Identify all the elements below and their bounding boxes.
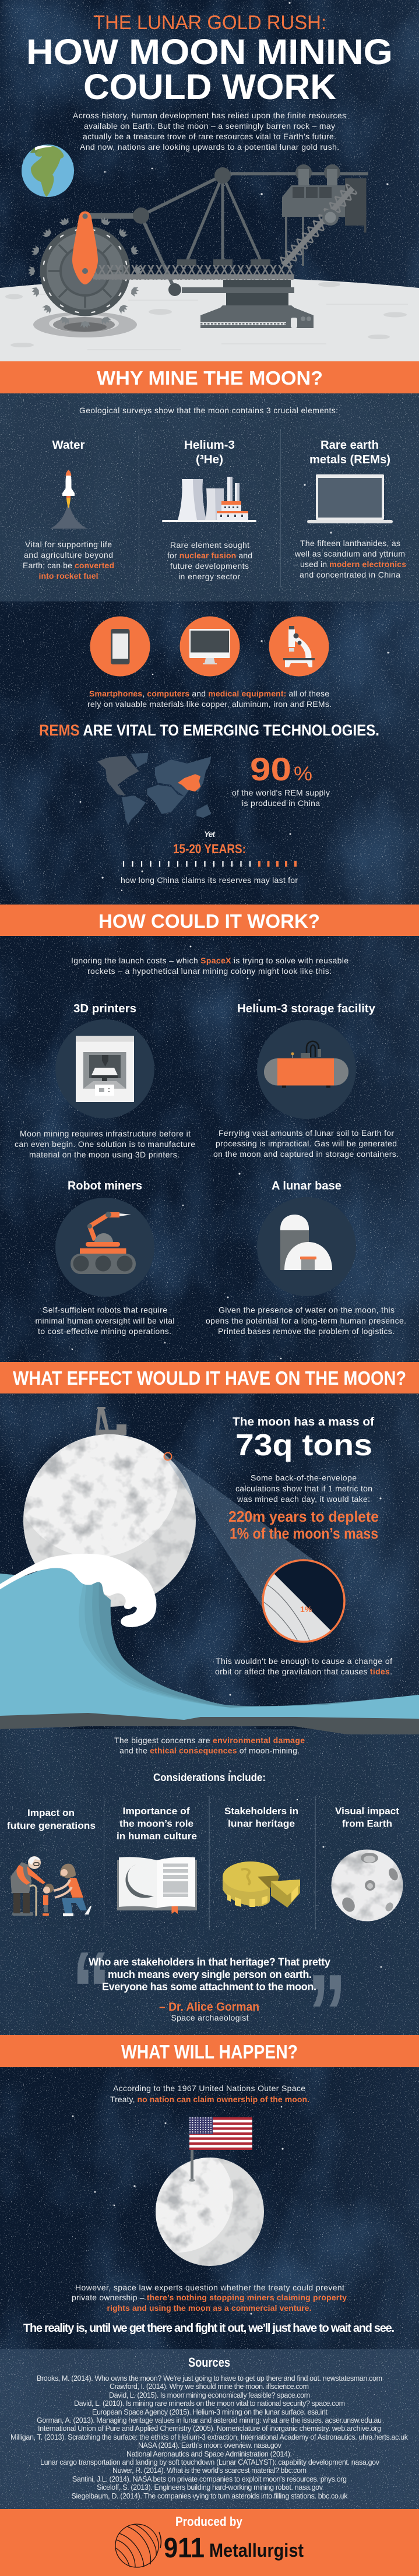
column: human culture: in human culture [117, 1831, 197, 1842]
description: – used in modern electronics [293, 559, 406, 569]
excavator diagonal lattice boom [277, 183, 358, 270]
intro paragraph: available on Earth. But the moon – a seemingly barren rock – may [84, 121, 335, 131]
description: and agriculture beyond [24, 550, 113, 559]
column: visual impact: from Earth [342, 1818, 392, 1829]
column: rare earth metals: metals (REMs) [309, 453, 390, 466]
item: helium-3 storage: Helium-3 storage facility [237, 1002, 376, 1015]
column: helium-3: Helium-3 [184, 439, 235, 452]
column: future generations [7, 1807, 96, 1916]
panel: hero header [0, 12, 419, 361]
description [15, 1129, 195, 1159]
panel: REMs are vital [39, 722, 379, 885]
icon: cut coin [223, 1861, 300, 1908]
stats text: 1% of the moon’s mass [230, 1525, 378, 1542]
sources list [10, 2374, 409, 2500]
sources list: Siceloff, S. (2013). Engineers building hard-working mining robot. nasa.gov [97, 2483, 323, 2491]
stats text: 73q tons [235, 1428, 372, 1462]
sources list: Gorman, A. (2013). Managing heritage values in lunar and asteroid mining: what are the issues. acser.unsw.edu.au [37, 2416, 382, 2424]
intro paragraph [73, 111, 346, 152]
panel: three elements [23, 406, 406, 587]
icon: 3D printer [55, 1019, 154, 1118]
icon: lunar base [257, 1197, 356, 1296]
treaty text: According to the 1967 United Nations Outer Space [113, 2084, 305, 2093]
sources list: National Aeronautics and Space Administration (2014). [126, 2450, 292, 2458]
panel: how it could work [15, 956, 406, 1336]
quote marks: ” [307, 1952, 347, 2075]
title: kicker: THE LUNAR GOLD RUSH: [93, 12, 326, 34]
column: human culture: Importance of [122, 1806, 190, 1817]
closing text: private ownership – there’s nothing stopping miners claiming property [72, 2293, 347, 2302]
icon: family [10, 1856, 91, 1916]
item: 3D printers [15, 1002, 195, 1159]
description: Printed bases remove the problem of logistics. [218, 1326, 395, 1336]
column: future generations: Impact on [27, 1807, 75, 1818]
sources list: David, L. (2010). Is mining rare minerals on the moon vital to national security? space.com [74, 2399, 345, 2408]
description [167, 540, 252, 581]
intro paragraph: actually be a treasure trove of rare resources vital to Earth’s future. [83, 132, 336, 141]
section heading: what effect [0, 1362, 419, 1393]
icon: american flag [189, 2117, 252, 2182]
quote marks [72, 1929, 347, 2075]
panel: what will happen [23, 2084, 395, 2335]
column: rare earth metals [293, 439, 406, 579]
description: Rare element sought [170, 540, 249, 550]
concerns text: and the ethical consequences of moon-mining. [119, 1746, 300, 1755]
stat: 15-20 years: 15-20 YEARS: [173, 842, 246, 856]
column: rare earth metals: Rare earth [321, 439, 379, 452]
item: lunar base: A lunar base [272, 1180, 341, 1192]
moon surface ground [0, 277, 419, 361]
panel: devices that use REMs [87, 617, 332, 709]
icon: mine on moon [96, 1407, 126, 1435]
column: future generations: future generations [7, 1820, 96, 1831]
stats text: calculations show that if 1 metric ton [235, 1484, 372, 1493]
item: robot miners: Robot miners [68, 1180, 142, 1192]
description [23, 540, 114, 580]
intro paragraph: Across history, human development has relied upon the finite resources [73, 111, 346, 120]
quotation: – Dr. Alice Gorman [159, 2001, 259, 2014]
stats text: Some back-of-the-envelope [251, 1473, 357, 1483]
zoomed 1 percent detail: 1% [300, 1604, 312, 1614]
marker: small circle [164, 1452, 171, 1461]
description: future developments [170, 561, 249, 571]
excavator frame and legs [87, 174, 368, 290]
illustration: moon [23, 1434, 196, 1607]
description: opens the potential for a long-term human presence. [206, 1316, 406, 1325]
section heading: what will happen [0, 2035, 419, 2067]
description: on the moon and captured in storage containers. [213, 1149, 399, 1159]
icon: rocket [50, 470, 87, 529]
description: Vital for supporting life [25, 540, 112, 549]
stats text: 220m years to deplete [228, 1508, 379, 1525]
icon: earth [22, 145, 74, 197]
stat: 90 percent: is produced in China [242, 798, 320, 808]
quote marks: “ [72, 1929, 111, 2053]
excavator tower and tracks [168, 280, 314, 328]
stat: 90 percent: of the world's REM supply [232, 788, 330, 797]
description: to cost-effective mining operations. [38, 1326, 171, 1336]
zoomed 1 percent detail [262, 1559, 346, 1643]
column: water [23, 439, 114, 580]
description: Earth; can be converted [23, 561, 114, 570]
panel: effect on the moon [0, 1392, 419, 1734]
description: The fifteen lanthanides, as [300, 539, 400, 548]
description [35, 1305, 175, 1336]
description: Self-sufficient robots that require [43, 1305, 167, 1315]
caption: Smartphones, computers and medical equipment: all of these [89, 689, 329, 698]
sources list: European Space Agency (2015). Helium-3 mining on the lunar surface. esa.int [92, 2408, 328, 2416]
sources list: Lunar cargo transportation and landing by soft touchdown (Lunar CATALYST): capability development. nasa.gov [40, 2458, 380, 2466]
intro text [71, 956, 348, 976]
column: helium-3: (³He) [196, 453, 223, 466]
description: for nuclear fusion and [167, 551, 252, 560]
excavator orange arm [72, 211, 98, 284]
concerns text: The biggest concerns are environmental damage [114, 1736, 305, 1745]
intro text: Ignoring the launch costs – which SpaceX is trying to solve with reusable [71, 956, 348, 965]
icon: laptop [307, 474, 393, 523]
caption: rely on valuable materials like copper, aluminum, iron and REMs. [87, 699, 332, 709]
column: human culture: the moon’s role [119, 1818, 193, 1829]
closing text: However, space law experts question whether the treaty could prevent [75, 2283, 344, 2292]
section heading: how could it work: HOW COULD IT WORK? [98, 910, 320, 932]
item: robot miners [35, 1180, 175, 1336]
section heading: what will happen: WHAT WILL HAPPEN? [121, 2041, 298, 2063]
heading: sources: Sources [188, 2355, 230, 2370]
title: main line 1: HOW MOON MINING [26, 32, 393, 72]
sources list: Brooks, M. (2014). Who owns the moon? We're just going to have to get up there and find out. newstatesman.com [37, 2374, 382, 2383]
sources list: David, L. (2015). Is moon mining economically feasible? space.com [109, 2391, 310, 2399]
description: Moon mining requires infrastructure before it [20, 1129, 191, 1138]
stats text [215, 1416, 392, 1676]
description [213, 1128, 399, 1159]
quotation [72, 1929, 347, 2075]
icon: storage tank [257, 1020, 356, 1119]
description: Given the presence of water on the moon, this [219, 1305, 395, 1315]
treaty text [110, 2084, 309, 2104]
sources list: NASA (2014). Earth's moon: overview. nasa.gov [138, 2441, 282, 2450]
caption [87, 689, 332, 709]
stat: 15-20 years [121, 829, 298, 885]
quotation: much means every single person on earth. [108, 1969, 312, 1980]
panel: concerns and considerations [7, 1736, 403, 2075]
quotation: Everyone has some attachment to the moon. [102, 1981, 316, 1993]
treaty text: Treaty, no nation can claim ownership of the moon. [110, 2095, 309, 2104]
sources list: Crawford, I. (2014). Why we should mine the moon. iflscience.com [110, 2383, 309, 2391]
column: visual impact [331, 1806, 403, 1921]
section heading: how could it work [0, 905, 419, 936]
tick bar [124, 861, 295, 867]
item: 3D printers: 3D printers [73, 1002, 136, 1015]
description [206, 1305, 406, 1336]
stats text: was mined each day, it would take: [237, 1494, 370, 1504]
icon: cratered moon [331, 1850, 403, 1921]
column: lunar heritage: Stakeholders in [224, 1806, 298, 1817]
icon: microscope [269, 617, 329, 676]
column: human culture [117, 1806, 197, 1914]
quotation: Who are stakeholders in that heritage? That pretty [89, 1956, 330, 1968]
heading: considerations: Considerations include: [153, 1772, 266, 1783]
column: helium-3 [162, 439, 256, 581]
stat: 90 percent [232, 751, 330, 808]
excavator cab and counterweight [282, 164, 366, 233]
description: well as scandium and yttrium [294, 549, 405, 558]
intro line: Geological surveys show that the moon contains 3 crucial elements: [79, 406, 338, 415]
excavator bucket wheel [28, 216, 142, 328]
column: lunar heritage [223, 1806, 300, 1908]
quotation: Space archaeologist [171, 2013, 249, 2022]
description: minimal human oversight will be vital [35, 1316, 175, 1325]
logo globe [115, 2524, 161, 2567]
stat: 90 percent: % [294, 763, 312, 785]
heading: REMS ARE VITAL TO EMERGING TECHNOLOGIES. [39, 722, 379, 739]
icon: robot [55, 1198, 154, 1297]
section heading: why mine the moon: WHY MINE THE MOON? [97, 367, 323, 389]
stat: 15-20 years: how long China claims its reserves may last for [121, 875, 298, 885]
sources list: International Union of Pure and Applied Chemistry (2005). Nomenclature of inorganic chemistry. web.archive.org [38, 2424, 381, 2433]
description: Ferrying vast amounts of lunar soil to Earth for [219, 1128, 394, 1138]
sources list: Nuwer, R. (2014). What is the world's scarcest material? bbc.com [112, 2466, 307, 2475]
description: and concentrated in China [300, 570, 400, 579]
column: lunar heritage: lunar heritage [228, 1818, 295, 1829]
excavator horizontal lattice boom [93, 265, 294, 280]
icon: book [117, 1857, 197, 1914]
icon: computer [179, 617, 240, 676]
description: into rocket fuel [38, 571, 98, 580]
logo: 911 Metallurgist: 911 [164, 2533, 205, 2564]
produced by label: Produced by [175, 2514, 243, 2529]
closing text: rights and using the moon as a commercial venture. [107, 2303, 311, 2313]
sources list: Siegelbaum, D. (2014). The companies vying to turn asteroids into filling stations. bbc.co.uk [71, 2492, 348, 2500]
closing text [23, 2283, 395, 2335]
stat: 15-20 years: Yet [204, 829, 216, 839]
column: water: Water [52, 439, 85, 452]
title: main line 2: COULD WORK [83, 67, 336, 107]
crater under wheel [33, 312, 137, 337]
illustration: tidal wave [0, 1554, 419, 1734]
column: visual impact: Visual impact [335, 1806, 399, 1817]
section heading: why mine the moon [0, 361, 419, 393]
sources list: Milligan, T. (2013). Scratching the surface: the ethics of Helium-3 extraction. International Academy of Astronautics. uhra.herts.ac.uk [10, 2433, 409, 2441]
item: lunar base [206, 1180, 406, 1336]
illustration: bucket-wheel excavator [28, 164, 368, 328]
sources list: Santini, J.L. (2014). NASA bets on private companies to exploit moon's resources. phys.org [72, 2475, 347, 2483]
logo: 911 Metallurgist: Metallurgist [209, 2540, 304, 2561]
stats text: This wouldn't be enough to cause a change of [216, 1656, 392, 1666]
stats text: orbit or affect the gravitation that causes tides. [215, 1667, 392, 1676]
icon: power plant [162, 477, 256, 522]
stat: 90 percent: 90 [250, 751, 291, 787]
concerns text [114, 1736, 305, 1755]
item: helium-3 storage [213, 1002, 399, 1159]
description: can even begin. One solution is to manufacture [15, 1139, 195, 1149]
description: in energy sector [178, 572, 240, 581]
logo: 911 Metallurgist [115, 2524, 304, 2567]
intro paragraph: And now, nations are looking upwards to a potential lunar gold rush. [80, 142, 339, 152]
description: material on the moon using 3D printers. [29, 1150, 179, 1159]
intro text: rockets – a hypothetical lunar mining colony might look like this: [87, 966, 332, 976]
panel: sources [10, 2355, 409, 2500]
zoom beam [167, 1456, 315, 1609]
footer [0, 2509, 419, 2576]
closing text: The reality is, until we get there and fight it out, we’ll just have to wait and see. [23, 2322, 395, 2335]
description [293, 539, 406, 579]
world map with China highlighted [97, 753, 211, 825]
illustration: moon [156, 2158, 264, 2266]
icon: smartphone [90, 617, 150, 676]
stats text: The moon has a mass of [233, 1416, 374, 1428]
description: processing is impractical. Gas will be generated [216, 1139, 397, 1148]
